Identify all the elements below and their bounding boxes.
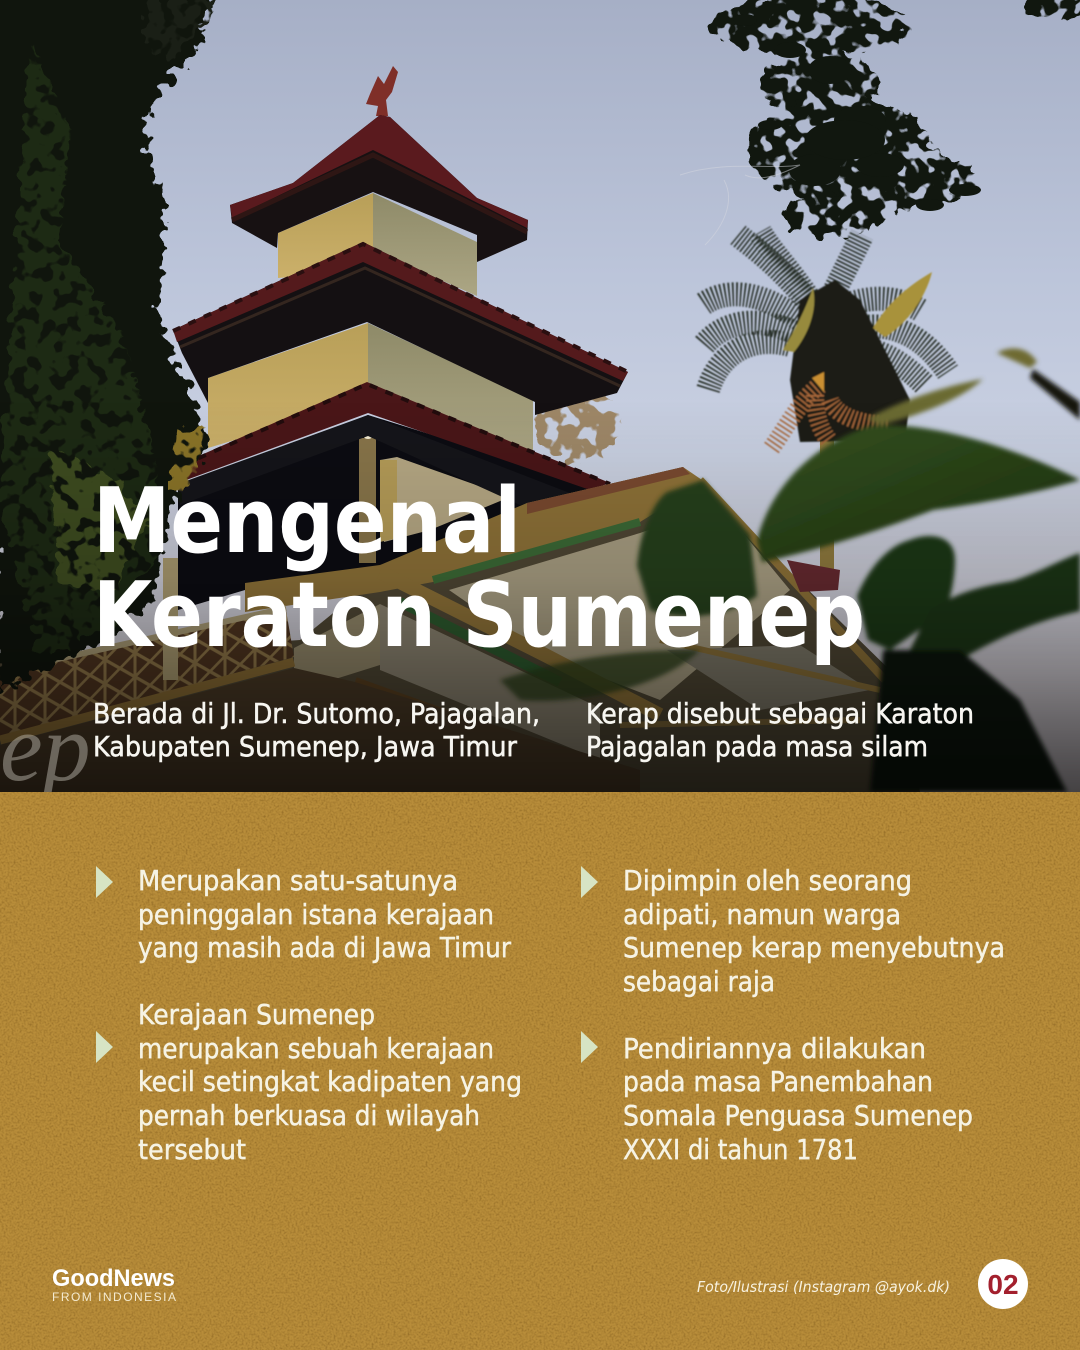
subtitle: location: Kabupaten Sumenep, Jawa Timur [93,730,517,763]
bullet item 4: XXXI di tahun 1781 [623,1133,858,1166]
tower: third roof [160,382,610,505]
tower: top wall [278,193,477,296]
bullet item 3: Dipimpin oleh seorang [623,864,912,897]
bullet item 3: adipati, namun warga [623,898,901,931]
bullet item 4: Somala Penguasa Sumenep [623,1099,973,1132]
sky [0,0,1080,792]
logo: GoodNews from Indonesia [52,1265,176,1304]
bullet item 1: peninggalan istana kerajaan [138,898,494,931]
icon: triangle bullet [581,1031,598,1063]
tower: second roof [173,242,628,415]
logo: GoodNews from Indonesia: FROM INDONESIA [52,1290,176,1304]
title: Mengenal [93,469,521,574]
script watermark: ep [0,694,91,801]
tower: top roof [230,115,528,262]
page number badge [978,1259,1028,1309]
bullet item 3: sebagai raja [623,965,775,998]
tower: finial [366,66,398,116]
subtitle: former name: Pajagalan pada masa silam [586,730,928,763]
tower: dark interior and lower wall [178,415,610,610]
bullet item 1: yang masih ada di Jawa Timur [138,931,511,964]
icon: triangle bullet [96,866,113,898]
title [93,469,865,668]
bullet item 2: Kerajaan Sumenep [138,998,375,1031]
title: Keraton Sumenep [93,563,865,668]
bullet item 2: merupakan sebuah kerajaan [138,1032,494,1065]
panel: photo of Keraton Sumenep [0,0,1080,801]
photo credit: Foto/Ilustrasi (Instagram @ayok.dk) [697,1278,950,1296]
bullet item 2 [96,998,522,1166]
building: lower storey [0,467,920,792]
subtitle: former name: Kerap disebut sebagai Karaton [586,697,974,730]
bullet item 4: pada masa Panembahan [623,1065,933,1098]
subtitle: location [93,697,540,763]
tree: left dark foliage [0,0,222,690]
icon: triangle bullet [581,866,598,898]
bullet item 1: Merupakan satu-satunya [138,864,458,897]
small bare tree behind the tower [536,389,620,461]
panel: gold textured background [0,792,1080,1350]
tower: second wall [208,323,533,458]
subtitle: former name [586,697,974,763]
bullet item 4 [581,1031,973,1166]
bullet item 3 [581,864,1005,998]
bullet item 1 [96,864,511,964]
bullet item 2: tersebut [138,1133,246,1166]
building: ornamental balustrade [0,558,640,792]
tower: column and lamp [359,427,376,563]
bullet item 2: kecil setingkat kadipaten yang [138,1065,522,1098]
icon: triangle bullet [96,1031,113,1063]
logo: GoodNews from Indonesia: GoodNews [52,1265,175,1292]
building: small red roof behind leaves [787,560,840,592]
subtitle: location: Berada di Jl. Dr. Sutomo, Pajagalan, [93,697,540,730]
leaves: blurred foreground [500,348,1080,792]
dark gradient overlay [0,400,1080,792]
bullet item 4: Pendiriannya dilakukan [623,1032,926,1065]
bullet item 3: Sumenep kerap menyebutnya [623,931,1005,964]
tree: top right branches [680,0,1080,245]
bullet item 2: pernah berkuasa di wilayah [138,1099,480,1132]
palm tree [702,232,948,570]
page number badge: 02 [987,1269,1019,1300]
